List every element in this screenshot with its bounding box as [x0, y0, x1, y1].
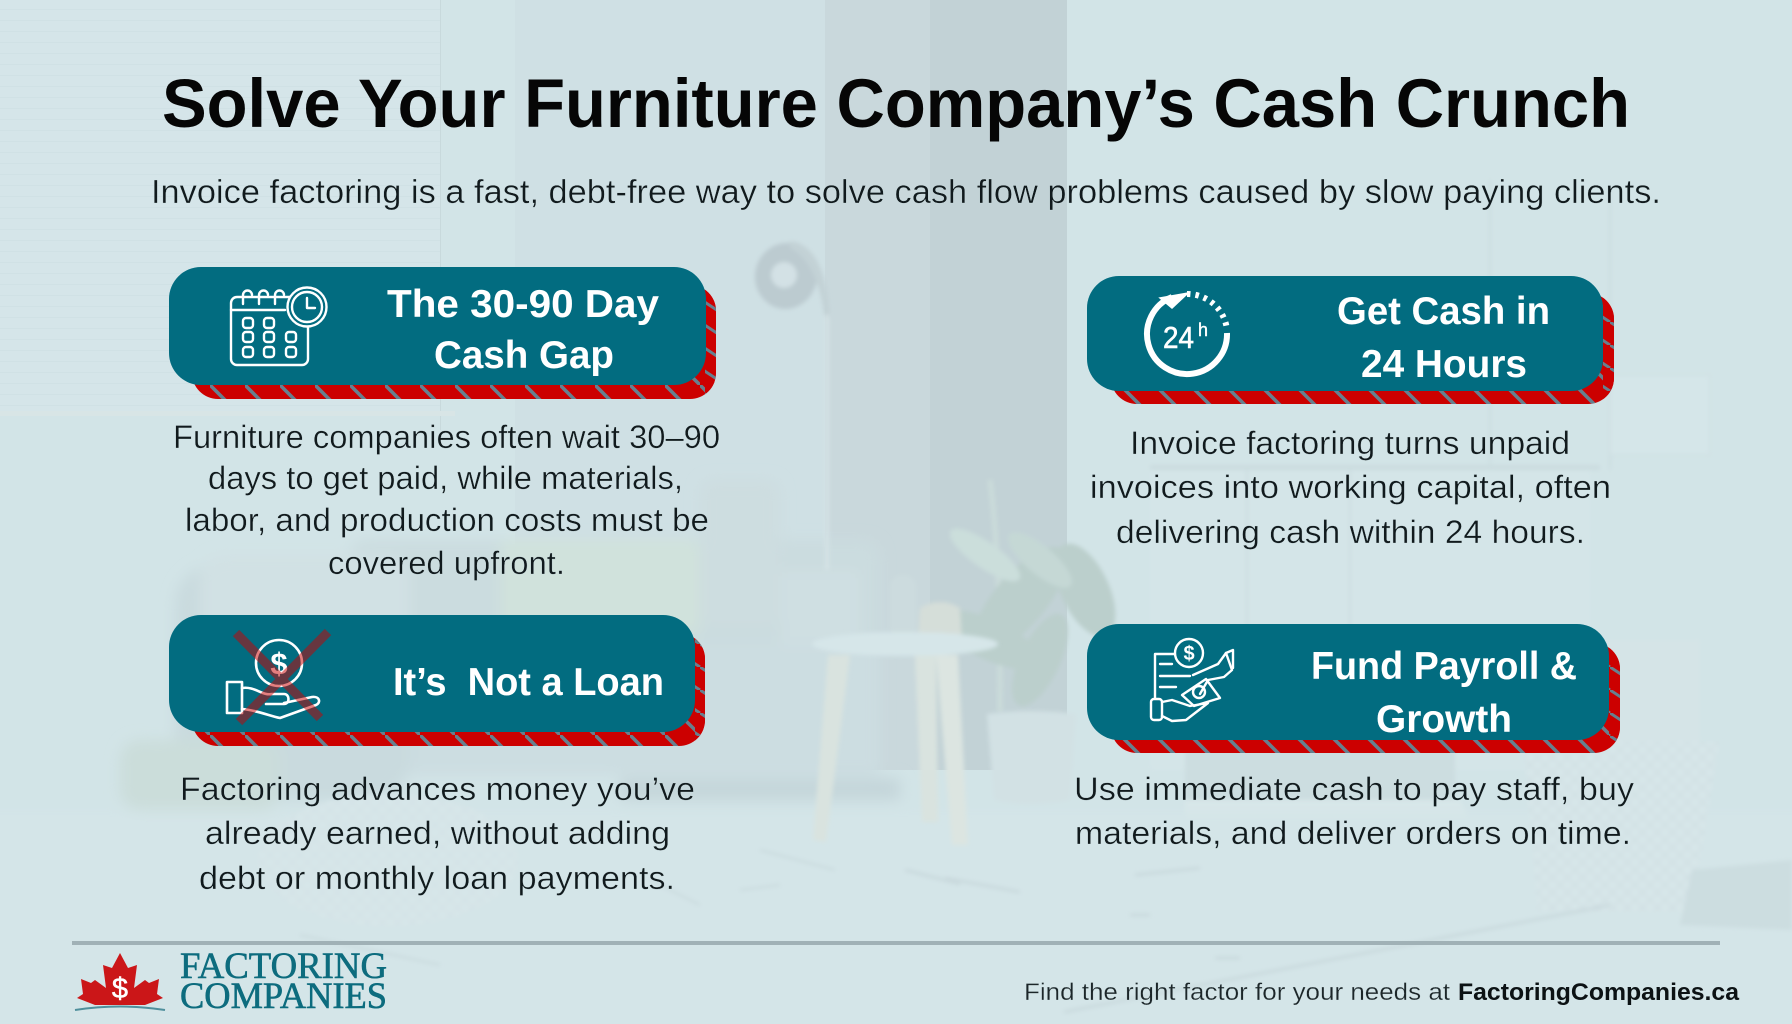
panel: the 30-90 day cash gap — [169, 267, 720, 581]
banner shadow striped — [1111, 643, 1620, 753]
description: Factoring advances money you’ve — [180, 771, 695, 807]
icon: crossed out hand with coin: $ — [270, 646, 288, 681]
description: Use immediate cash to pay staff, buy — [1074, 771, 1634, 807]
banner — [1087, 624, 1609, 740]
description — [173, 419, 720, 581]
background side table — [812, 575, 998, 845]
description — [1074, 771, 1634, 851]
logo wordmark — [180, 946, 387, 1017]
banner heading: Cash Gap — [434, 334, 614, 377]
background pouf — [258, 794, 518, 926]
title: Solve Your Furniture Company’s Cash Crunch — [162, 65, 1630, 142]
panel: it's not a loan — [169, 615, 705, 896]
icon: calendar with clock — [231, 288, 326, 365]
description: materials, and deliver orders on time. — [1075, 815, 1631, 851]
banner heading: Fund Payroll & — [1311, 645, 1577, 688]
description — [1090, 425, 1611, 550]
icon: payroll document, coin and hands: $ — [1183, 643, 1195, 665]
banner shadow striped — [1111, 293, 1614, 404]
description: days to get paid, while materials, — [208, 460, 683, 496]
banner heading — [1337, 290, 1550, 386]
banner heading: Growth — [1376, 698, 1512, 741]
icon: maple leaf with dollar: $ — [112, 973, 128, 1005]
background floor marks — [300, 850, 1610, 1012]
footer call to action — [1024, 979, 1739, 1006]
banner shadow striped — [192, 633, 705, 746]
banner — [169, 267, 706, 385]
panel: fund payroll and growth — [1074, 624, 1634, 851]
description: Invoice factoring turns unpaid — [1130, 425, 1570, 461]
banner heading — [1311, 645, 1577, 741]
background sofa and pillows — [0, 480, 1792, 1024]
description: debt or monthly loan payments. — [199, 860, 675, 896]
footer call to action: Find the right factor for your needs at — [1024, 979, 1450, 1006]
background plant pot — [987, 711, 1076, 804]
description — [180, 771, 695, 896]
background wire basket — [1523, 640, 1792, 930]
icon: crossed out hand with coin — [227, 632, 328, 722]
footer call to action: FactoringCompanies.ca — [1458, 979, 1739, 1006]
background lamp — [750, 238, 830, 570]
banner — [169, 615, 695, 732]
icon: maple leaf with dollar — [75, 953, 165, 1010]
footer divider — [72, 941, 1720, 945]
banner heading: Get Cash in — [1337, 290, 1550, 333]
logo wordmark: FACTORING — [180, 946, 387, 987]
icon: payroll document, coin and hands — [1151, 639, 1233, 721]
description: labor, and production costs must be — [185, 502, 709, 538]
logo: factoring companies — [75, 946, 387, 1017]
description: delivering cash within 24 hours. — [1116, 514, 1585, 550]
subtitle: Invoice factoring is a fast, debt-free way to solve cash flow problems caused by slow paying clients. — [151, 173, 1661, 210]
banner shadow striped — [192, 285, 716, 399]
description: Furniture companies often wait 30–90 — [173, 419, 720, 455]
icon: 24 hour clock: 24 — [1163, 320, 1194, 355]
description: already earned, without adding — [205, 815, 670, 851]
icon: 24 hour clock: h — [1198, 320, 1208, 340]
banner — [1087, 276, 1603, 391]
background plant — [931, 480, 1128, 714]
icon: 24 hour clock — [1147, 293, 1227, 374]
description: covered upfront. — [328, 545, 565, 581]
banner heading: 24 Hours — [1361, 343, 1527, 386]
description: invoices into working capital, often — [1090, 469, 1611, 505]
banner heading: It’s Not a Loan — [393, 661, 664, 704]
panel: get cash in 24 hours — [1087, 276, 1614, 550]
banner heading: The 30-90 Day — [387, 283, 659, 326]
banner heading — [387, 283, 659, 377]
logo wordmark: COMPANIES — [180, 976, 387, 1017]
